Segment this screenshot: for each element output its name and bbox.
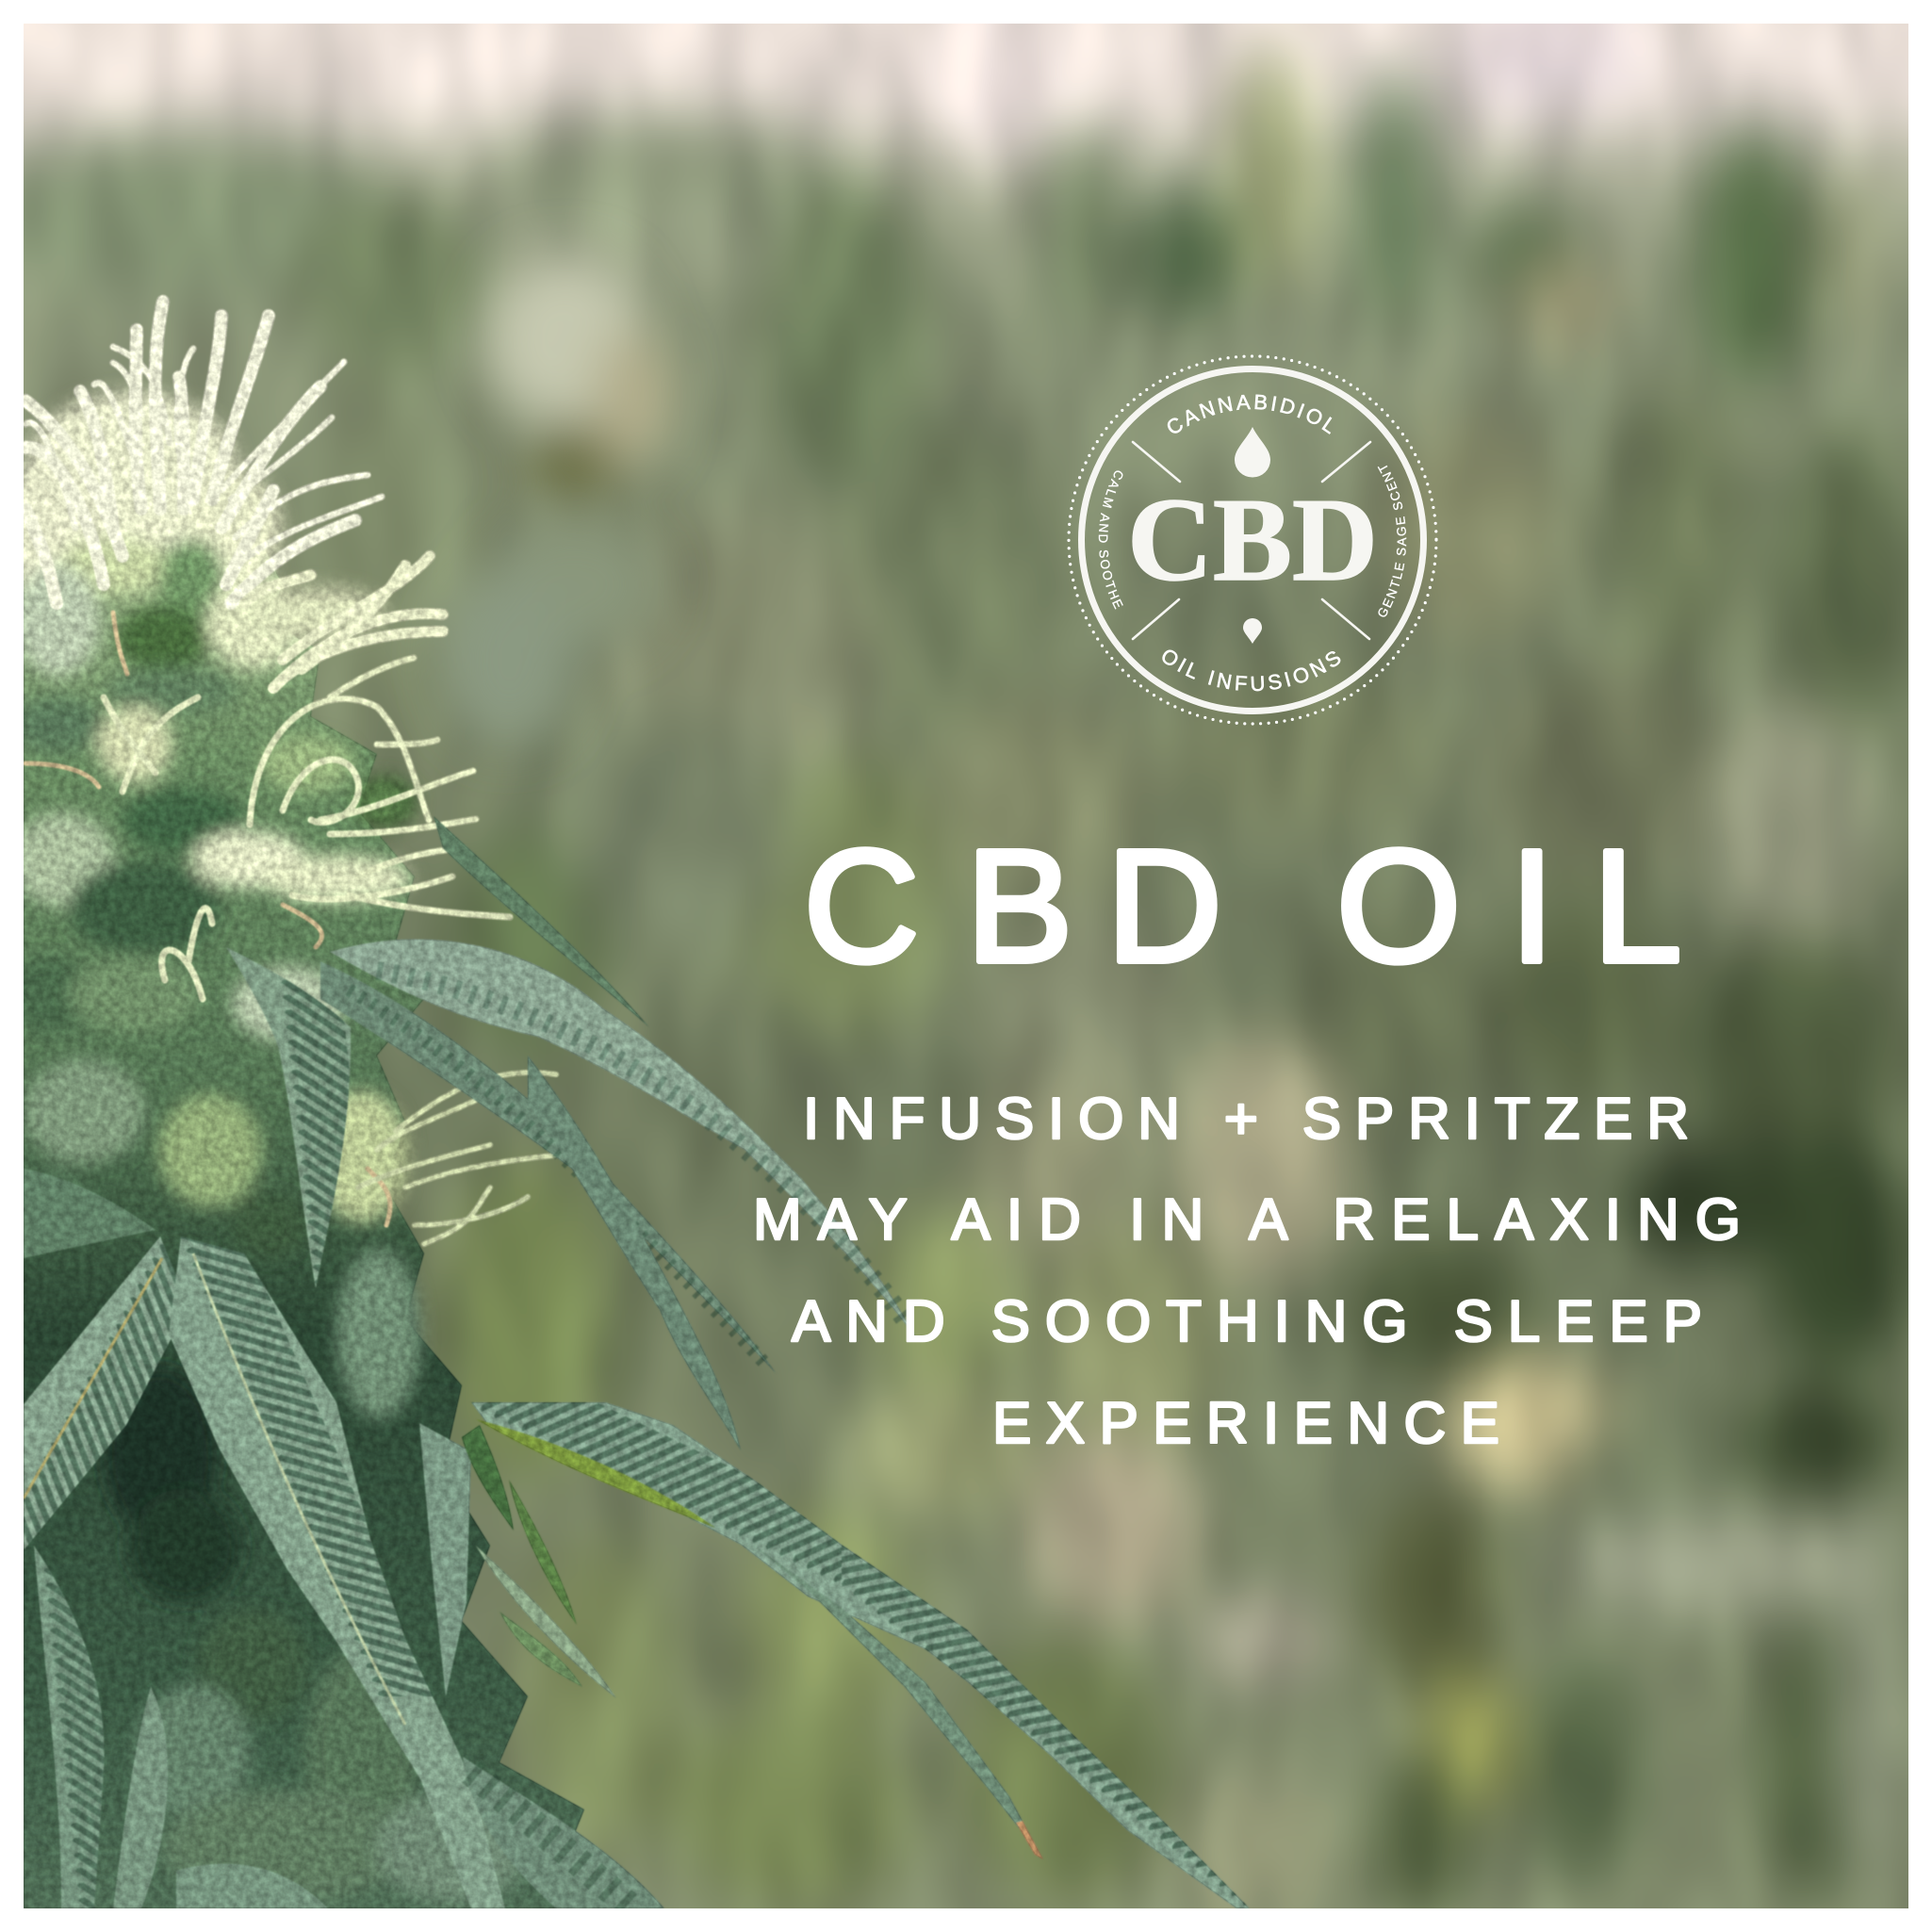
- badge: solid ring: [1082, 369, 1423, 711]
- plant: big serrated leaf reaching lower right: [471, 1402, 1250, 1908]
- photo: blurred background flower bud: [443, 254, 669, 745]
- subtitle line 4: EXPERIENCE: [992, 1391, 1499, 1456]
- badge: CALM AND SOOTHE arc text: CALM AND SOOTHE: [1099, 470, 1123, 609]
- badge: top oil drop: [1235, 427, 1270, 477]
- plant: frosted bottom foliage: [463, 1757, 664, 1908]
- plant: slim hanging leaf: [528, 1056, 741, 1450]
- subtitle text block: [753, 1087, 1741, 1456]
- title: CBD OIL: [804, 817, 1682, 996]
- badge: CANNABIDIOL arc text: CANNABIDIOL: [1167, 394, 1333, 434]
- badge: CBD letters: CBD: [1127, 475, 1378, 606]
- subtitle line 1: INFUSION + SPRITZER: [803, 1087, 1689, 1152]
- subtitle line 3: AND SOOTHING SLEEP: [792, 1289, 1702, 1354]
- badge: GENTLE SAGE SCENT arc text: GENTLE SAGE SCENT: [1378, 466, 1406, 617]
- plant: large central leaflet: [169, 1236, 505, 1908]
- plant: frosted top leaf: [330, 939, 917, 1339]
- badge: dotted outer ring: [1069, 356, 1436, 724]
- plant: mid lower leaflets: [113, 1423, 616, 1908]
- subtitle line 2: MAY AID IN A RELAXING: [753, 1187, 1741, 1253]
- plant: thin upper leaf blade: [434, 816, 649, 1027]
- badge: bottom drop: [1243, 618, 1262, 644]
- plant: top-left leaflet: [24, 1169, 156, 1258]
- badge: four diagonal rays: [1133, 442, 1370, 639]
- badge: OIL INFUSIONS arc text: OIL INFUSIONS: [1162, 650, 1340, 692]
- plant: narrow lower blade with tan tip: [754, 1546, 1043, 1859]
- badge: CBD cannabidiol seal: [1069, 356, 1436, 724]
- plant: foliage mass: [24, 539, 584, 1908]
- plant: lower-left leaflet: [34, 1546, 105, 1908]
- plant: large left leaflet: [24, 1236, 188, 1550]
- plant: white pistil hairs: [25, 302, 565, 1244]
- plant: bud colour patches: [1, 391, 528, 1904]
- photo: foreground cannabis plant: [1, 302, 1250, 1908]
- plant: long curved leaf: [320, 961, 777, 1374]
- plant: upright central leaf: [226, 947, 351, 1288]
